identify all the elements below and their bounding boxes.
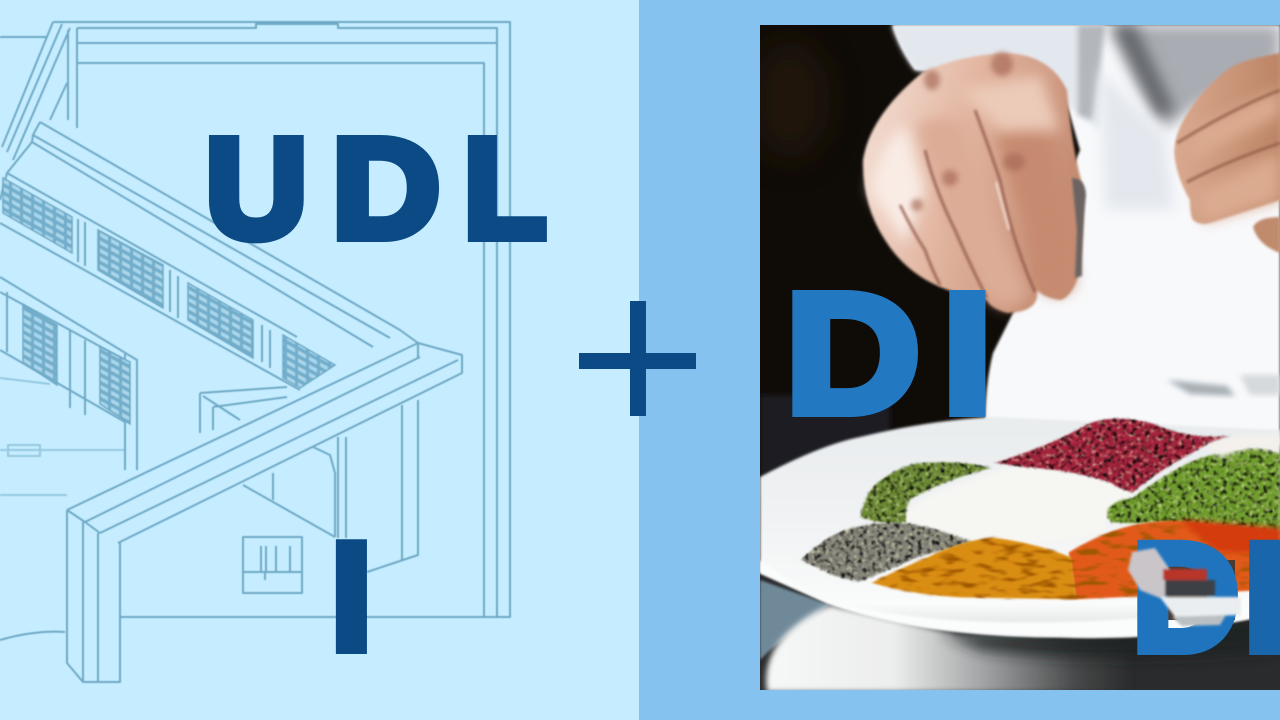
heading: UDL: D <box>332 109 440 267</box>
partial DI logo with inset image <box>1126 540 1280 655</box>
photo: chef seasoning a plate of spices <box>750 25 1280 692</box>
finger gaps and knuckles <box>900 110 1035 298</box>
spice piles <box>800 418 1280 600</box>
building line drawing illustration <box>0 22 510 682</box>
dark background <box>760 25 1280 570</box>
heading: UDL: U <box>206 109 307 267</box>
heading: DI <box>785 258 992 448</box>
plate <box>760 417 1280 638</box>
left panel background <box>0 0 639 720</box>
heading: DI: I <box>943 258 992 448</box>
building windows <box>3 178 335 424</box>
small inset image <box>1128 548 1241 626</box>
right panel background <box>639 0 1280 720</box>
heading: UDL: L <box>464 110 546 268</box>
pinch of spice <box>1072 178 1086 278</box>
partial DI logo with inset image: D <box>1132 512 1239 682</box>
heading: DI: D <box>785 258 920 448</box>
letter I: I <box>328 508 375 685</box>
plus sign <box>579 301 696 416</box>
heading: UDL <box>206 109 546 268</box>
left hand <box>863 52 1086 313</box>
chef coat <box>892 25 1280 445</box>
plate shadow <box>939 620 1249 665</box>
foreground white cloth <box>766 605 1130 692</box>
icon: small wall box <box>243 537 302 593</box>
right hand <box>1174 53 1280 253</box>
lower table <box>760 570 1280 690</box>
